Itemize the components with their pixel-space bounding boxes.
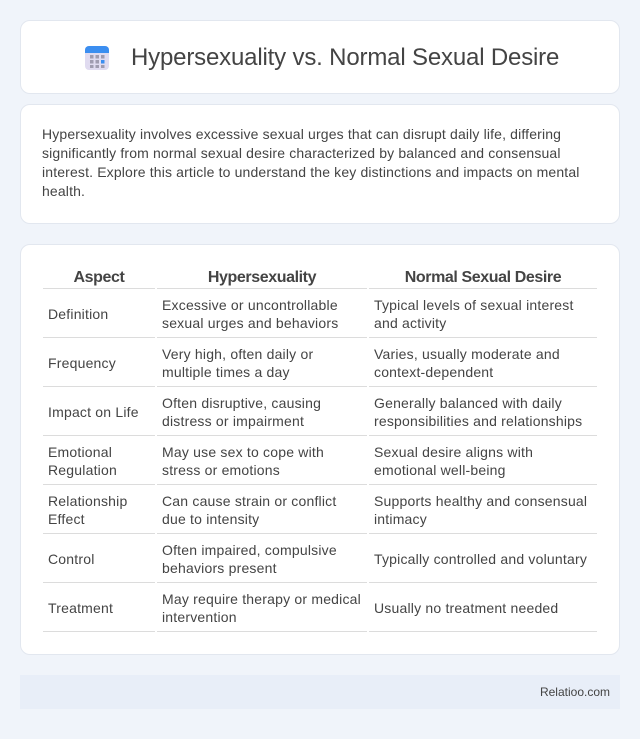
row: relationship effect: due to intensity [162, 511, 259, 527]
row: emotional regulation: stress or emotions [162, 462, 280, 478]
row: emotional regulation [48, 444, 533, 478]
row: emotional regulation: Sexual desire aligns with [374, 444, 533, 460]
row: impact on life: distress or impairment [162, 413, 304, 429]
footer credit: Relatioo.com [540, 685, 610, 699]
row: impact on life: Impact on Life [48, 404, 139, 420]
row: treatment [48, 591, 558, 625]
row: treatment: May require therapy or medical [162, 591, 361, 607]
row: emotional regulation: Emotional [48, 444, 112, 460]
intro text: significantly from normal sexual desire characterized by balanced and consensual [42, 145, 561, 161]
row: definition: Typical levels of sexual interest [374, 297, 574, 313]
row: definition: Excessive or uncontrollable [162, 297, 338, 313]
row: impact on life: Generally balanced with daily [374, 395, 562, 411]
table header: aspect: Aspect [74, 269, 124, 286]
row: frequency: Very high, often daily or [162, 346, 313, 362]
intro text: health. [42, 183, 85, 199]
row: definition: sexual urges and behaviors [162, 315, 338, 331]
title panel [20, 20, 620, 94]
row: frequency: Varies, usually moderate and [374, 346, 560, 362]
row: control: Control [48, 551, 95, 567]
row: frequency: Frequency [48, 355, 116, 371]
row: frequency: context-dependent [374, 364, 493, 380]
intro text: interest. Explore this article to understand the key distinctions and impacts on mental [42, 164, 580, 180]
table panel [20, 244, 620, 655]
row: control: Often impaired, compulsive [162, 542, 337, 558]
row: frequency: multiple times a day [162, 364, 290, 380]
intro panel [20, 104, 620, 224]
table header: hypersexuality: Hypersexuality [208, 269, 316, 286]
intro text: Hypersexuality involves excessive sexual urges that can disrupt daily life, differing [42, 126, 561, 142]
row: relationship effect: intimacy [374, 511, 427, 527]
row: relationship effect [48, 493, 587, 527]
row: emotional regulation: May use sex to cope with [162, 444, 324, 460]
row: definition: Definition [48, 306, 108, 322]
row: emotional regulation: emotional well-being [374, 462, 506, 478]
icon: calendar [85, 46, 109, 70]
row: impact on life: Often disruptive, causing [162, 395, 321, 411]
footer bar [20, 675, 620, 709]
row: control: behaviors present [162, 560, 277, 576]
row: definition: and activity [374, 315, 446, 331]
row: frequency [48, 346, 560, 380]
row: relationship effect: Effect [48, 511, 85, 527]
row: impact on life: responsibilities and relationships [374, 413, 582, 429]
row: impact on life [48, 395, 582, 429]
row: definition [48, 297, 574, 331]
title: Hypersexuality vs. Normal Sexual Desire [131, 44, 559, 71]
intro text [42, 126, 580, 199]
row: treatment: Treatment [48, 600, 113, 616]
table header: normal sexual desire: Normal Sexual Desire [405, 269, 561, 286]
row: control: Typically controlled and voluntary [374, 551, 587, 567]
row: control [48, 542, 587, 576]
row: emotional regulation: Regulation [48, 462, 117, 478]
row: relationship effect: Supports healthy and consensual [374, 493, 587, 509]
row: relationship effect: Can cause strain or conflict [162, 493, 336, 509]
row: treatment: intervention [162, 609, 237, 625]
row: relationship effect: Relationship [48, 493, 127, 509]
row: treatment: Usually no treatment needed [374, 600, 558, 616]
